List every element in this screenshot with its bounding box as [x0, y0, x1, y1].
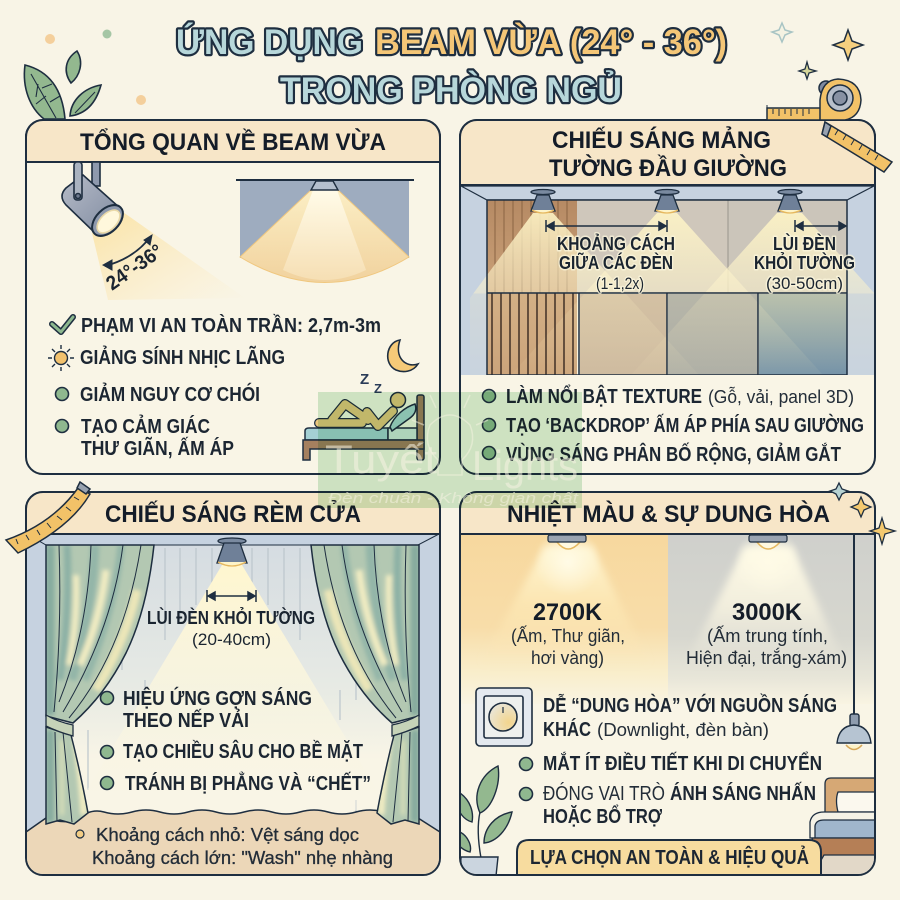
floor note: Khoảng cách nhỏ: Vệt sáng dọc: [96, 824, 359, 845]
list item: ĐÓNG VAI TRÒ: [543, 782, 665, 805]
title: TRONG PHÒNG NGỦ: [280, 70, 622, 110]
heading: [549, 125, 787, 182]
list item: THƯ GIÃN, ẤM ÁP: [81, 437, 234, 460]
label: 3000K: Hiện đại, trắng-xám): [686, 647, 847, 668]
label: spacing: (1-1,2x): [596, 274, 644, 293]
label: spacing: [557, 233, 675, 293]
icon: sparkles bottom right: [830, 483, 895, 544]
icon: sparkles top right: [772, 23, 863, 79]
label: spacing: KHOẢNG CÁCH: [557, 233, 675, 254]
plant: [456, 766, 512, 876]
list item: [506, 384, 854, 408]
list item: TẠO CẢM GIÁC: [81, 415, 210, 438]
icon: zzz: [360, 371, 382, 396]
icon: sleeping person on bed: [303, 392, 424, 460]
beam angle arrow: [105, 236, 151, 266]
beam cone: [92, 210, 245, 300]
label: 3000K: 3000K: [732, 599, 803, 626]
scene: warm and neutral halves: [456, 528, 876, 877]
heading: TƯỜNG ĐẦU GIƯỜNG: [549, 154, 787, 182]
callout: LỰA CHỌN AN TOÀN & HIỆU QUẢ: [530, 845, 809, 869]
bullet: [56, 388, 68, 400]
icon: left curtain: [46, 545, 156, 827]
icon: sun: [48, 345, 74, 371]
title: BEAM VỪA (24° - 36°): [375, 22, 727, 62]
icon: ceiling light: [217, 538, 247, 566]
bullet: [482, 390, 496, 402]
heading: CHIẾU SÁNG RÈM CỬA: [105, 499, 361, 528]
list item: [543, 782, 816, 828]
panel header: [26, 120, 440, 162]
callout: [517, 840, 821, 875]
icon: downlight: [531, 190, 555, 213]
text: blend: (Downlight, đèn bàn): [597, 719, 769, 740]
list item: LÀM NỔI BẬT TEXTURE: [506, 384, 702, 408]
heading: TỔNG QUAN VỀ BEAM VỪA: [80, 128, 386, 156]
bullet: [482, 418, 496, 432]
floor note: [92, 824, 393, 868]
title: ỨNG DỤNG: [176, 22, 363, 62]
icon: tape measure top right: [767, 79, 892, 172]
text: blend: [543, 693, 837, 741]
bullet: [100, 746, 114, 758]
watermark: Lights: [472, 442, 578, 489]
list item: TẠO CHIỀU SÂU CHO BỀ MẶT: [123, 739, 363, 763]
icon: downlight: [655, 190, 679, 213]
list item: (Gỗ, vải, panel 3D): [708, 386, 854, 407]
arrow: setback: [207, 590, 256, 602]
icon: neutral fixture: [749, 535, 787, 549]
panel header: [460, 492, 875, 534]
panel header: [26, 492, 440, 534]
label: setback: [754, 233, 855, 293]
floor band: [26, 810, 440, 875]
label: 2700K: 2700K: [533, 599, 603, 626]
icon: zzz: Z: [374, 381, 382, 396]
list item: MẮT ÍT ĐIỀU TIẾT KHI DI CHUYỂN: [543, 751, 822, 775]
icon: zzz: Z: [360, 371, 369, 388]
icon: spotlight: [62, 162, 129, 242]
heading: CHIẾU SÁNG MẢNG: [552, 125, 771, 154]
arrow: setback from wall: [795, 220, 846, 232]
icon: dimmer switch: [476, 688, 532, 746]
bullet: [520, 758, 532, 770]
list item: VÙNG SÁNG PHÂN BỐ RỘNG, GIẢM GẮT: [506, 442, 841, 466]
label: setback: (20-40cm): [192, 630, 271, 649]
bed corner: [810, 778, 876, 877]
list item: PHẠM VI AN TOÀN TRẦN: 2,7m-3m: [81, 314, 381, 337]
bullet: [76, 830, 84, 838]
panel: overview: [26, 120, 440, 474]
label: 3000K: (Ấm trung tính,: [707, 625, 828, 646]
watermark: Tuyết: [325, 438, 437, 482]
bullet: [100, 776, 114, 790]
panel: colour temperature: [456, 492, 876, 877]
list item: [81, 415, 234, 460]
heading: NHIỆT MÀU & SỰ DUNG HÒA: [507, 500, 830, 528]
list item: ÁNH SÁNG NHẤN: [670, 782, 816, 805]
label: setback: LÙI ĐÈN: [773, 233, 836, 254]
bullet: [520, 788, 532, 800]
floor note: Khoảng cách lớn: "Wash" nhẹ nhàng: [92, 847, 393, 868]
icon: moon: [388, 340, 418, 372]
icon: pendant lamp: [837, 534, 871, 750]
beam section diagram: [236, 179, 414, 282]
label: 2700K: [511, 599, 625, 668]
icon: tape ribbon left: [6, 482, 90, 553]
watermark: [318, 392, 582, 508]
panel: curtain lighting: [26, 492, 440, 875]
label: setback: KHỎI TƯỜNG: [754, 252, 855, 273]
label: 3000K: [686, 599, 847, 668]
list item: [123, 686, 312, 732]
title: [176, 22, 727, 110]
icon: downlight: [778, 190, 802, 213]
text: blend: KHÁC: [543, 718, 591, 741]
label: setback: LÙI ĐÈN KHỎI TƯỜNG: [147, 607, 315, 628]
decorative dots and leaves: [24, 30, 146, 119]
bullet: [482, 446, 496, 460]
watermark: Đèn chuẩn - Không gian chất: [328, 490, 579, 507]
label: setback: [147, 607, 315, 649]
arrow: spacing between lights: [546, 220, 667, 232]
wall scene: [461, 186, 900, 375]
icon: right curtain: [309, 545, 419, 827]
label: 2700K: (Ấm, Thư giãn,: [511, 625, 625, 646]
label: setback: (30-50cm): [766, 274, 843, 293]
label: 2700K: hơi vàng): [531, 647, 604, 668]
list item: GIẢNG SÍNH NHỊC LÃNG: [80, 346, 285, 369]
list item: HIỆU ỨNG GỢN SÁNG: [123, 686, 312, 710]
text: blend: DỄ “DUNG HÒA” VỚI NGUỒN SÁNG: [543, 693, 837, 717]
list item: TRÁNH BỊ PHẲNG VÀ “CHẾT”: [125, 772, 371, 795]
icon: check: [52, 317, 73, 332]
angle label: 24°-36°: [102, 240, 167, 295]
label: spacing: GIỮA CÁC ĐÈN: [559, 252, 673, 273]
list item: GIẢM NGUY CƠ CHÓI: [80, 382, 260, 406]
icon: warm fixture: [548, 535, 586, 549]
bullet: [100, 692, 114, 704]
bullet: [56, 420, 68, 432]
list item: HOẶC BỔ TRỢ: [543, 804, 662, 828]
panel header: [460, 120, 875, 185]
curtain scene: [26, 534, 440, 875]
list item: THEO NẾP VẢI: [123, 709, 249, 732]
panel: headboard wall: [460, 120, 900, 474]
